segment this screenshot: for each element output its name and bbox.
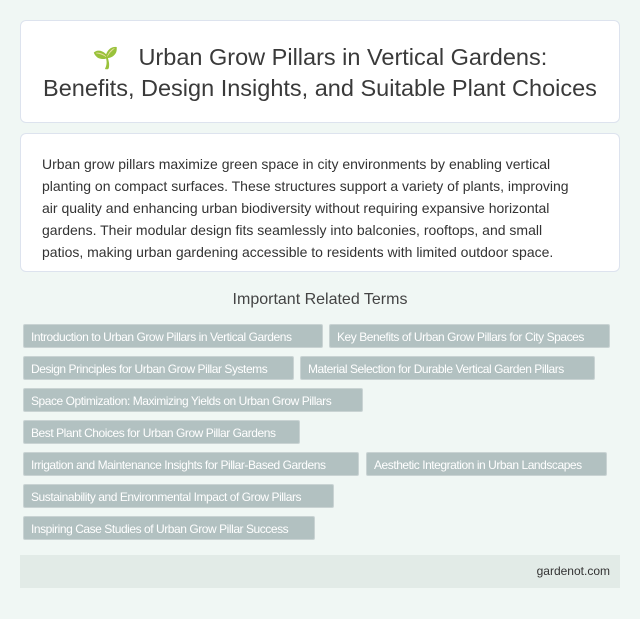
- description text: air quality and enhancing urban biodiversity without requiring expansive horizontal: [42, 200, 549, 216]
- description card: [20, 133, 620, 272]
- tag 1: Introduction to Urban Grow Pillars in Vertical Gardens: [31, 330, 292, 344]
- tag 5: [23, 388, 363, 412]
- tag 10: [23, 516, 315, 540]
- tag 1: [23, 324, 323, 348]
- tag 7: Irrigation and Maintenance Insights for Pillar-Based Gardens: [31, 458, 326, 472]
- section heading: Important Related Terms: [233, 291, 407, 308]
- tag 4: Material Selection for Durable Vertical Garden Pillars: [308, 362, 564, 376]
- tag 9: [23, 484, 334, 508]
- tag 6: Best Plant Choices for Urban Grow Pillar Gardens: [31, 426, 276, 440]
- tag 4: [300, 356, 595, 380]
- tag 7: [23, 452, 359, 476]
- tag 8: Aesthetic Integration in Urban Landscapes: [374, 458, 582, 472]
- title: [43, 44, 597, 101]
- tag 5: Space Optimization: Maximizing Yields on Urban Grow Pillars: [31, 394, 331, 408]
- tag 10: Inspiring Case Studies of Urban Grow Pillar Success: [31, 522, 288, 536]
- tag 8: [366, 452, 607, 476]
- footer text: gardenot.com: [537, 564, 610, 578]
- title: Benefits, Design Insights, and Suitable Plant Choices: [43, 75, 597, 101]
- tag 9: Sustainability and Environmental Impact of Grow Pillars: [31, 490, 301, 504]
- tag 2: [329, 324, 610, 348]
- description text: gardens. Their modular design fits seamlessly into balconies, rooftops, and small: [42, 222, 542, 238]
- tag 6: [23, 420, 300, 444]
- tag 3: Design Principles for Urban Grow Pillar Systems: [31, 362, 267, 376]
- title card: [20, 20, 620, 123]
- footer: [20, 555, 620, 588]
- title: 🌱 Urban Grow Pillars in Vertical Gardens:: [93, 44, 547, 71]
- tag 2: Key Benefits of Urban Grow Pillars for City Spaces: [337, 330, 584, 344]
- description text: planting on compact surfaces. These structures support a variety of plants, improving: [42, 178, 569, 194]
- description text: patios, making urban gardening accessible to residents with limited outdoor space.: [42, 244, 553, 260]
- description text: [42, 156, 569, 260]
- tag 3: [23, 356, 294, 380]
- description text: Urban grow pillars maximize green space in city environments by enabling vertical: [42, 156, 550, 172]
